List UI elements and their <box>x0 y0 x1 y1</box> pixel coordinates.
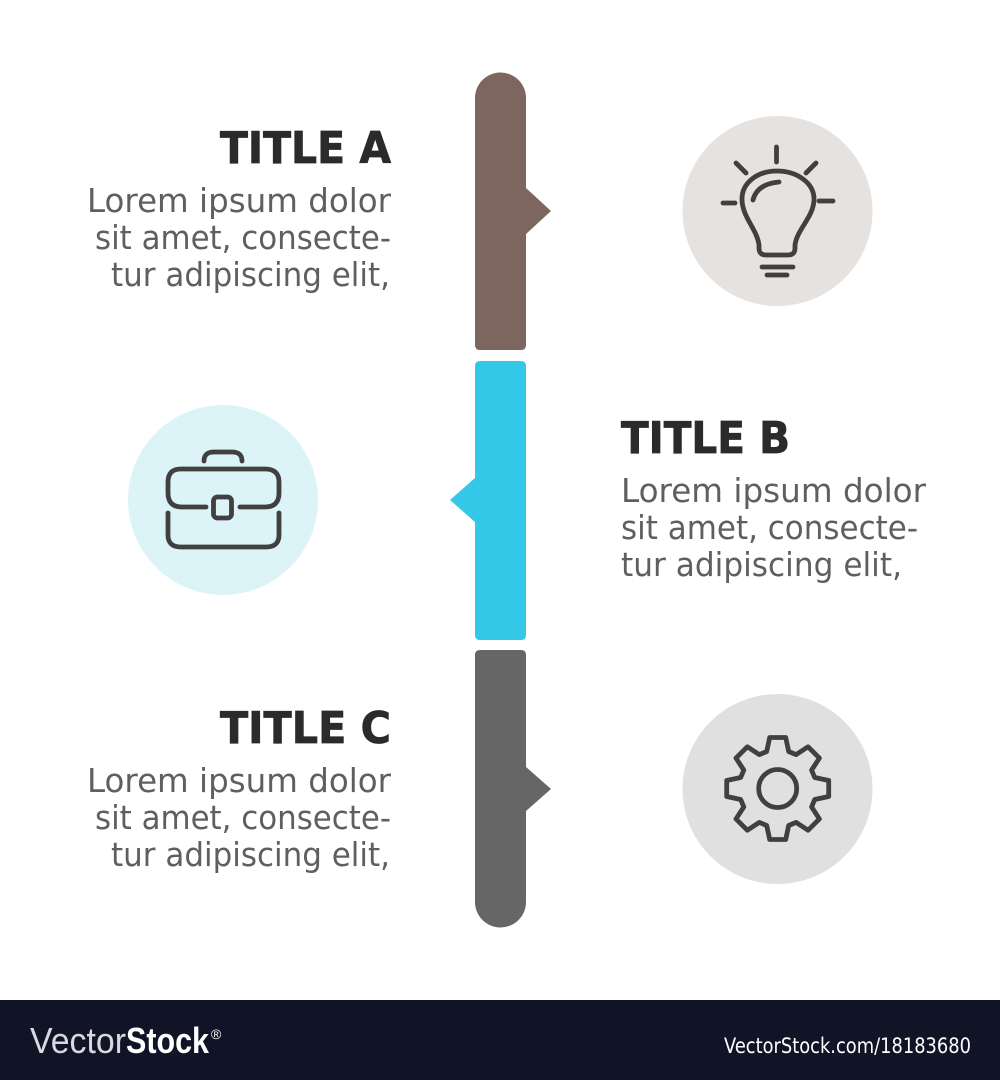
text block: section C body: Lorem ipsum dolor <box>87 761 391 800</box>
heading: title A: TITLE A <box>220 123 391 174</box>
timeline segment: gray with arrow <box>475 650 551 928</box>
text block: section B body: tur adipiscing elit, <box>621 545 902 584</box>
text block: section B body <box>621 471 926 584</box>
heading: title C: TITLE C <box>220 703 391 754</box>
panel: section B <box>128 361 926 640</box>
text block: section C body: tur adipiscing elit, <box>111 835 390 874</box>
timeline segment: brown with arrow <box>475 73 551 350</box>
footer bar <box>0 1000 1000 1080</box>
panel: section A <box>87 73 872 350</box>
text block: section A body: tur adipiscing elit, <box>111 255 390 294</box>
icon: briefcase in circle <box>128 405 318 595</box>
text block: section C body <box>87 761 391 874</box>
timeline segment: blue with arrow <box>450 361 526 640</box>
footer logo: VectorStock <box>30 1020 222 1061</box>
icon: gear in circle <box>682 694 872 884</box>
footer logo: VectorStock: Stock <box>126 1020 210 1061</box>
text block: section A body: sit amet, consecte- <box>95 218 391 257</box>
panel: section C <box>87 650 872 928</box>
footer logo: VectorStock: ® <box>211 1026 222 1042</box>
heading: title B: TITLE B <box>621 413 790 464</box>
footer logo: VectorStock: Vector <box>30 1020 126 1061</box>
text block: section B body: Lorem ipsum dolor <box>621 471 926 510</box>
text block: section B body: sit amet, consecte- <box>621 508 918 547</box>
text block: section A body: Lorem ipsum dolor <box>87 181 391 220</box>
text block: section A body <box>87 181 391 294</box>
icon: light bulb in circle <box>682 116 872 306</box>
text block: section C body: sit amet, consecte- <box>95 798 391 837</box>
